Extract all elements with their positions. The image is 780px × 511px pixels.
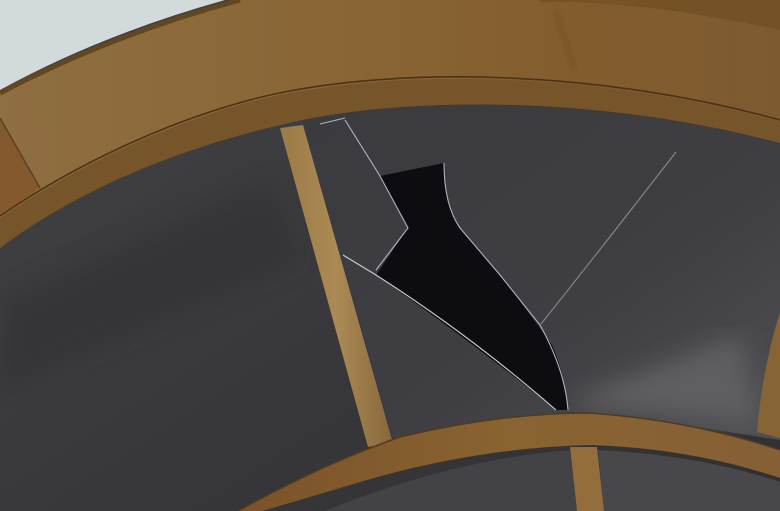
upper wooden arch [0, 0, 780, 248]
lower glass [325, 450, 577, 511]
lower right glass [598, 450, 780, 511]
glass pane: right [303, 106, 780, 440]
broken hole [376, 163, 568, 410]
wall [0, 0, 225, 90]
vertical mullion [280, 125, 393, 447]
reflection: lighter lower right [575, 335, 760, 425]
reflection: dark upper left band [0, 180, 300, 390]
right mullion [757, 312, 780, 438]
lower wooden arch [238, 413, 780, 511]
small lower mullion [570, 447, 604, 511]
cracks [320, 118, 676, 410]
